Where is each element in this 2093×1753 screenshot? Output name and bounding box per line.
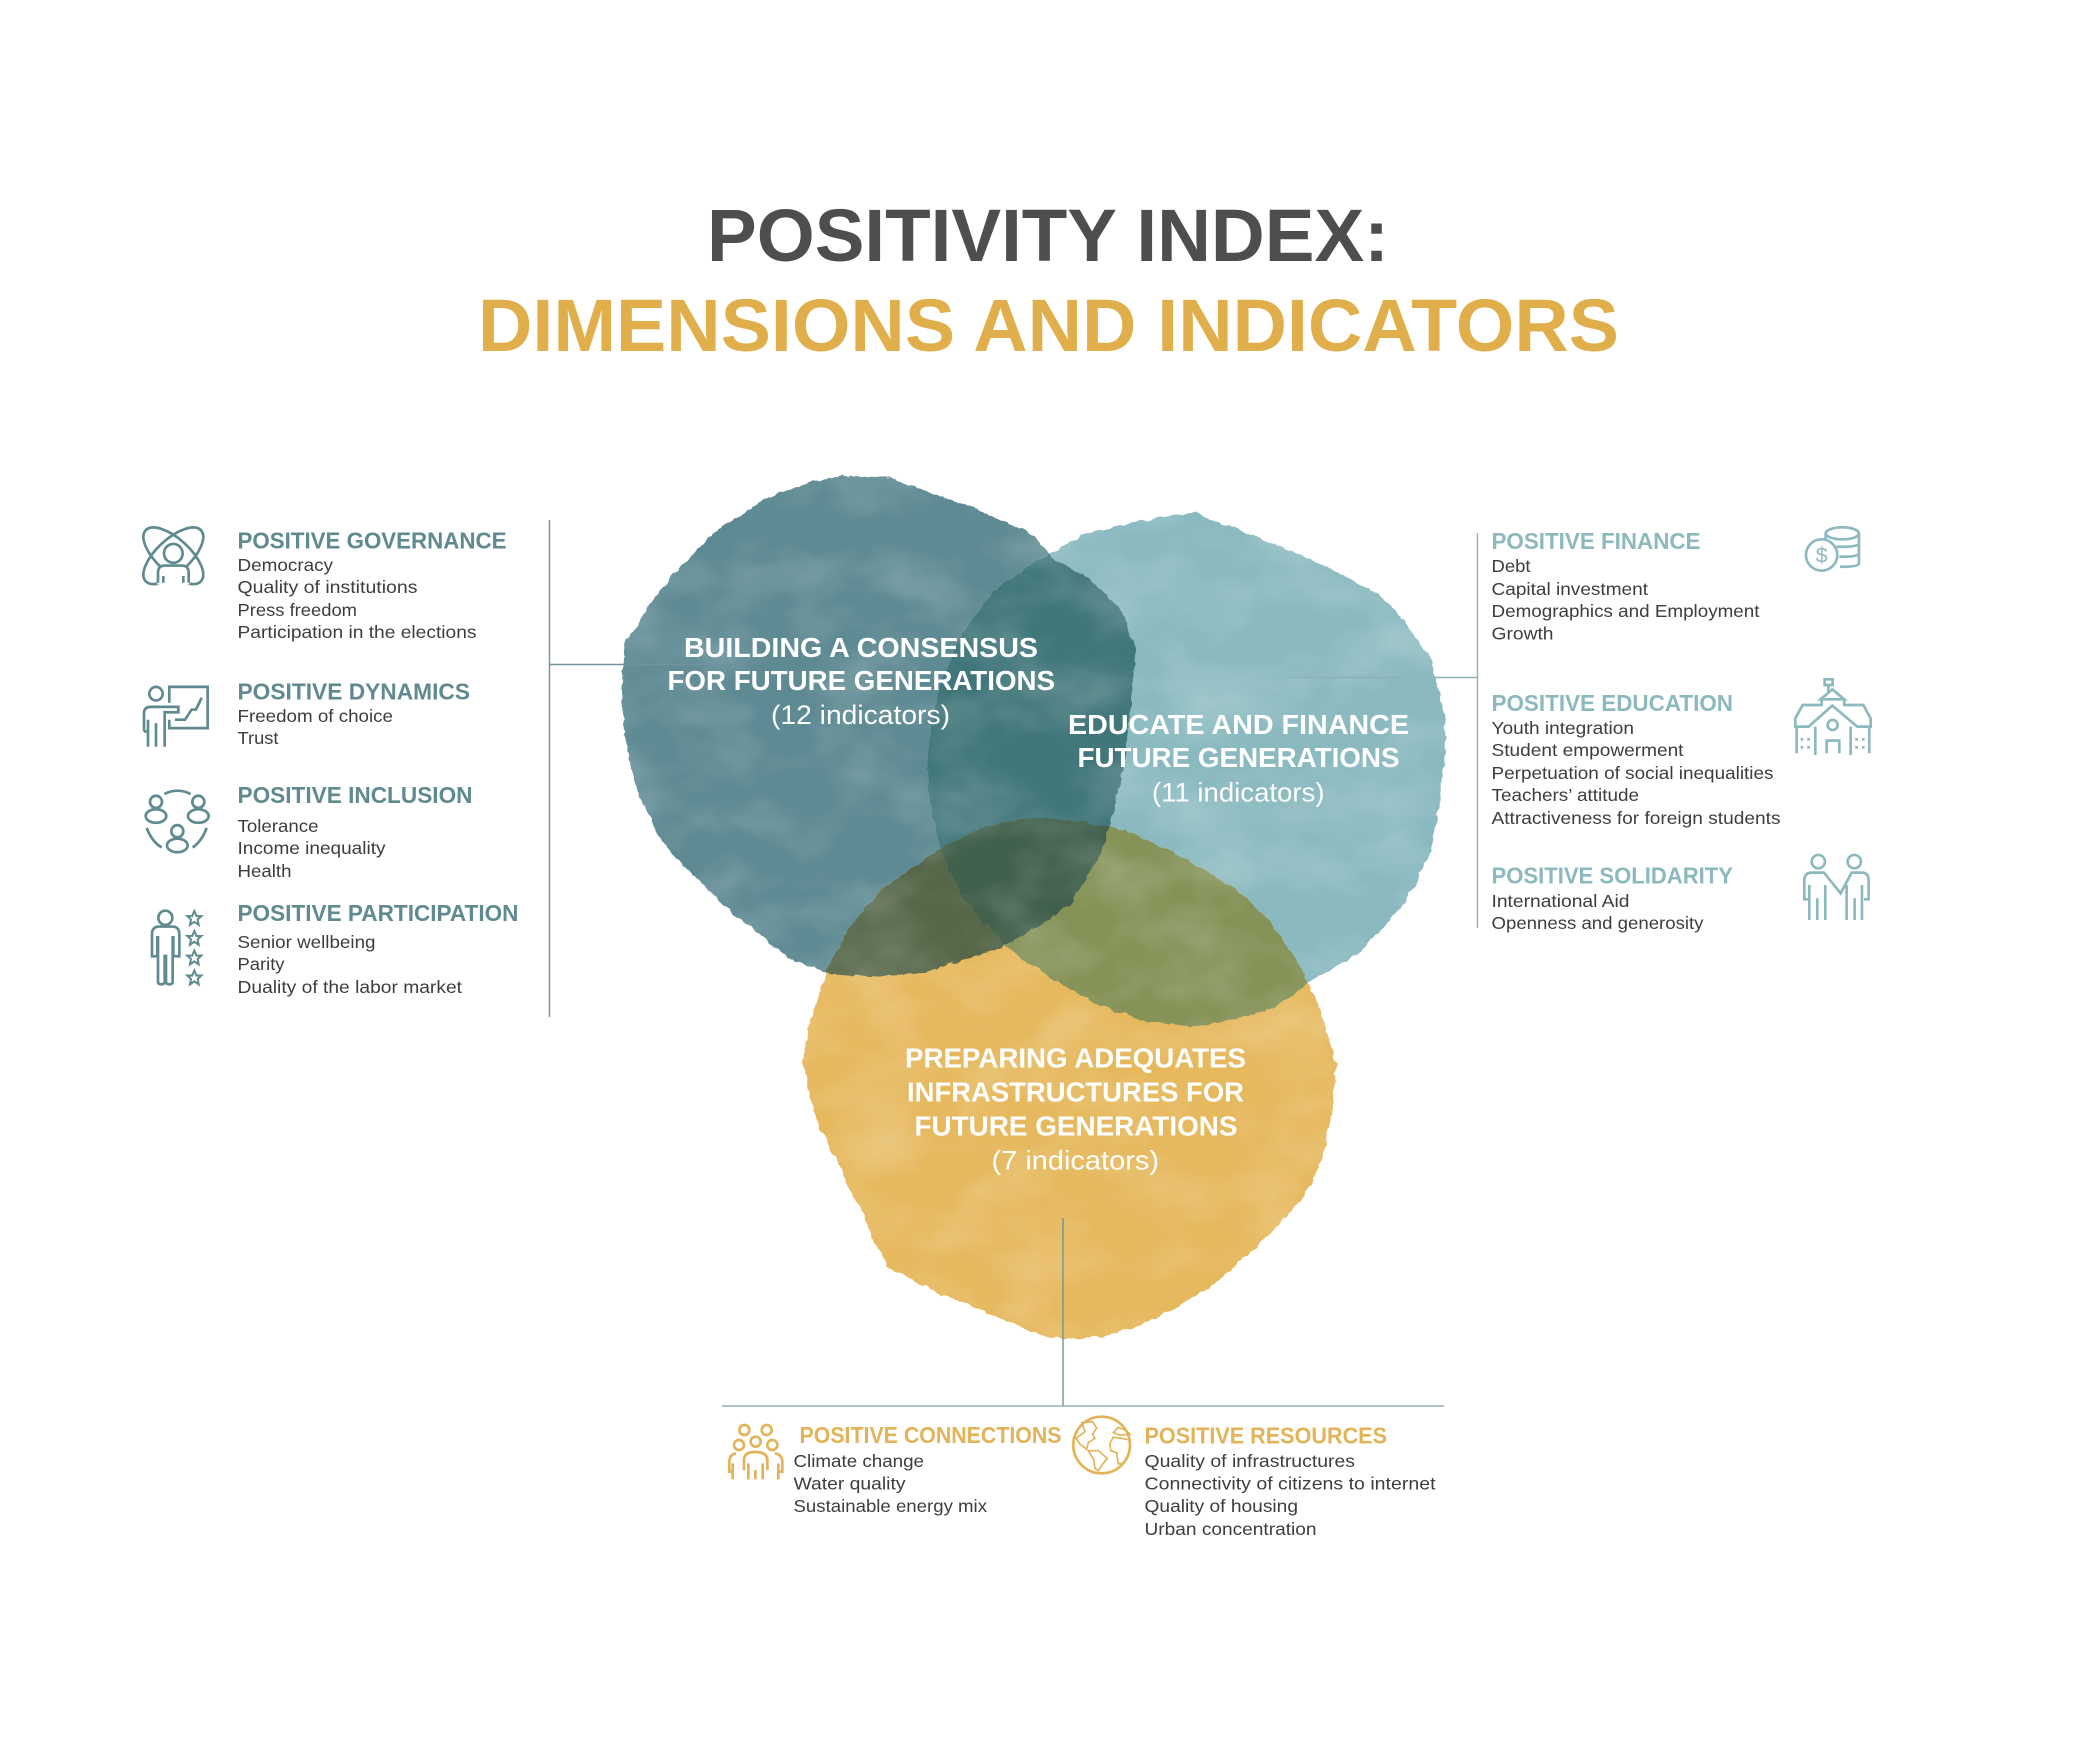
- indicator list: participation: Parity: [238, 954, 285, 974]
- indicator list: governance: Quality of institutions: [238, 577, 418, 597]
- indicator list: education: [1492, 718, 1781, 828]
- icon: group of people: [729, 1425, 782, 1479]
- panel: positive participation: [238, 900, 518, 997]
- icon: person with atom orbits: [134, 518, 212, 594]
- icon: person with four stars: [152, 911, 201, 984]
- indicator list: finance: Demographics and Employment: [1492, 601, 1760, 621]
- indicator list: finance: Growth: [1492, 624, 1554, 644]
- circle: building a consensus: [621, 476, 1136, 977]
- icon: two people shaking hands: [1804, 855, 1869, 920]
- icon: school building: [1795, 679, 1871, 755]
- circle label: educate and finance: [1068, 709, 1409, 808]
- indicator list: connections: [794, 1451, 987, 1516]
- circle label: educate and finance: FUTURE GENERATIONS: [1078, 742, 1400, 773]
- indicator list: resources: Urban concentration: [1144, 1519, 1316, 1539]
- title: [478, 194, 1619, 367]
- connector lines: right: [1290, 533, 1478, 928]
- title: DIMENSIONS AND INDICATORS: [478, 284, 1619, 367]
- overlap: education and infrastructures: [940, 818, 1308, 1028]
- heading: positive dynamics: POSITIVE DYNAMICS: [238, 678, 470, 704]
- heading: positive resources: POSITIVE RESOURCES: [1144, 1422, 1387, 1448]
- indicator list: solidarity: International Aid: [1492, 891, 1630, 911]
- overlap: consensus and education: [926, 554, 1136, 849]
- heading: positive governance: POSITIVE GOVERNANCE: [238, 528, 506, 554]
- circle label: building a consensus: [668, 632, 1055, 730]
- heading: positive finance: POSITIVE FINANCE: [1492, 528, 1700, 554]
- panel: positive solidarity: [1492, 862, 1733, 933]
- indicator list: dynamics: Freedom of choice: [238, 706, 393, 726]
- icon: presenter with chart: [144, 687, 208, 747]
- indicator list: resources: Connectivity of citizens to internet: [1144, 1474, 1436, 1494]
- circle label: preparing adequates infrastructures: (7 indicators): [992, 1146, 1159, 1176]
- heading: positive participation: POSITIVE PARTICIPATION: [238, 900, 518, 926]
- circle label: educate and finance: (11 indicators): [1152, 778, 1324, 808]
- icon: three people in a circle: [146, 791, 209, 852]
- indicator list: governance: Press freedom: [238, 600, 357, 620]
- circle label: preparing adequates infrastructures: [905, 1042, 1246, 1176]
- indicator list: finance: Debt: [1492, 556, 1531, 576]
- indicator list: dynamics: [238, 706, 393, 748]
- indicator list: inclusion: [238, 816, 386, 881]
- heading: positive connections: POSITIVE CONNECTIONS: [800, 1422, 1062, 1448]
- circle: educate and finance: [927, 513, 1445, 1027]
- indicator list: connections: Climate change: [794, 1451, 924, 1471]
- panel: positive finance: [1492, 528, 1760, 644]
- circle label: preparing adequates infrastructures: FUTURE GENERATIONS: [914, 1110, 1238, 1142]
- indicator list: resources: Quality of housing: [1144, 1496, 1298, 1516]
- indicator list: governance: Democracy: [238, 555, 333, 575]
- connector lines: bottom: [722, 1218, 1444, 1406]
- circle label: building a consensus: (12 indicators): [771, 700, 950, 730]
- circle: preparing adequates infrastructures: [803, 817, 1336, 1338]
- indicator list: governance: [238, 555, 477, 642]
- indicator list: finance: [1492, 556, 1760, 644]
- icon: coins with dollar sign: [1806, 527, 1859, 571]
- indicator list: participation: [238, 932, 462, 997]
- indicator list: participation: Senior wellbeing: [238, 932, 376, 952]
- panel: positive connections: [794, 1422, 1062, 1516]
- indicator list: inclusion: Income inequality: [238, 838, 386, 858]
- panel: positive inclusion: [238, 782, 472, 881]
- panel: positive governance: [238, 528, 506, 642]
- indicator list: education: Perpetuation of social inequalities: [1492, 763, 1774, 783]
- indicator list: inclusion: Tolerance: [238, 816, 318, 836]
- icon: coins with dollar sign: $: [1816, 544, 1828, 568]
- heading: positive solidarity: POSITIVE SOLIDARITY: [1492, 862, 1733, 888]
- indicator list: finance: Capital investment: [1492, 579, 1648, 599]
- indicator list: solidarity: Openness and generosity: [1492, 913, 1704, 933]
- circle label: preparing adequates infrastructures: INFRASTRUCTURES FOR: [907, 1076, 1244, 1108]
- circle label: building a consensus: BUILDING A CONSENSUS: [684, 632, 1038, 663]
- heading: positive education: POSITIVE EDUCATION: [1492, 690, 1733, 716]
- indicator list: resources: [1144, 1451, 1436, 1539]
- overlap: all three dimensions: [940, 818, 1110, 945]
- indicator list: education: Attractiveness for foreign students: [1492, 808, 1781, 828]
- indicator list: governance: Participation in the elections: [238, 622, 477, 642]
- panel: positive education: [1492, 690, 1781, 828]
- indicator list: participation: Duality of the labor market: [238, 977, 462, 997]
- venn diagram of three watercolour circles: [621, 476, 1445, 1338]
- panel: positive dynamics: [238, 678, 470, 748]
- circle label: educate and finance: EDUCATE AND FINANCE: [1068, 709, 1409, 740]
- circle label: building a consensus: FOR FUTURE GENERATIONS: [668, 665, 1055, 696]
- indicator list: dynamics: Trust: [238, 728, 279, 748]
- indicator list: connections: Sustainable energy mix: [794, 1496, 987, 1516]
- panel: positive resources: [1144, 1422, 1436, 1539]
- indicator list: education: Youth integration: [1492, 718, 1634, 738]
- circle label: preparing adequates infrastructures: PREPARING ADEQUATES: [905, 1042, 1246, 1074]
- connector lines: left: [550, 520, 738, 1017]
- overlap: consensus and infrastructures: [826, 825, 1109, 977]
- icon: globe: [1073, 1417, 1130, 1473]
- indicator list: inclusion: Health: [238, 861, 292, 881]
- title: POSITIVITY INDEX:: [707, 194, 1389, 277]
- indicator list: education: Student empowerment: [1492, 740, 1684, 760]
- heading: positive inclusion: POSITIVE INCLUSION: [238, 782, 472, 808]
- indicator list: connections: Water quality: [794, 1474, 906, 1494]
- indicator list: solidarity: [1492, 891, 1704, 933]
- indicator list: education: Teachers’ attitude: [1492, 785, 1639, 805]
- indicator list: resources: Quality of infrastructures: [1144, 1451, 1355, 1471]
